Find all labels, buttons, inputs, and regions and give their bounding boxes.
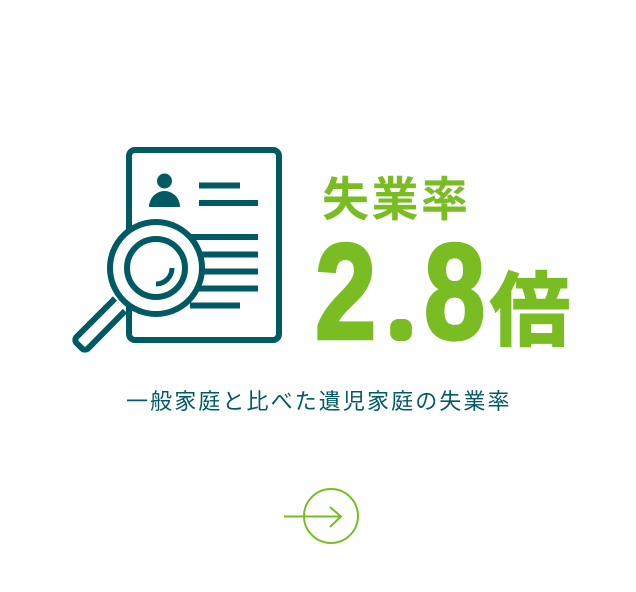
unit: times: 倍 xyxy=(490,267,570,356)
circle xyxy=(304,489,358,543)
heading: unemployment rate: 失業率 xyxy=(322,173,470,226)
magnifying glass handle xyxy=(75,298,125,350)
big number: 2.8 xyxy=(315,217,485,368)
magnifying glass lens xyxy=(110,222,202,314)
digit 2: 2 xyxy=(315,217,376,368)
decimal point: . xyxy=(396,298,407,342)
arrow button xyxy=(284,489,358,543)
arrow xyxy=(284,507,341,527)
person silhouette xyxy=(149,174,180,207)
document outline xyxy=(129,150,279,340)
caption: 一般家庭と比べた遺児家庭の失業率 xyxy=(126,389,512,414)
icon: resume under magnifying glass xyxy=(75,150,279,350)
text lines xyxy=(190,186,258,306)
digit 8: 8 xyxy=(424,217,485,368)
